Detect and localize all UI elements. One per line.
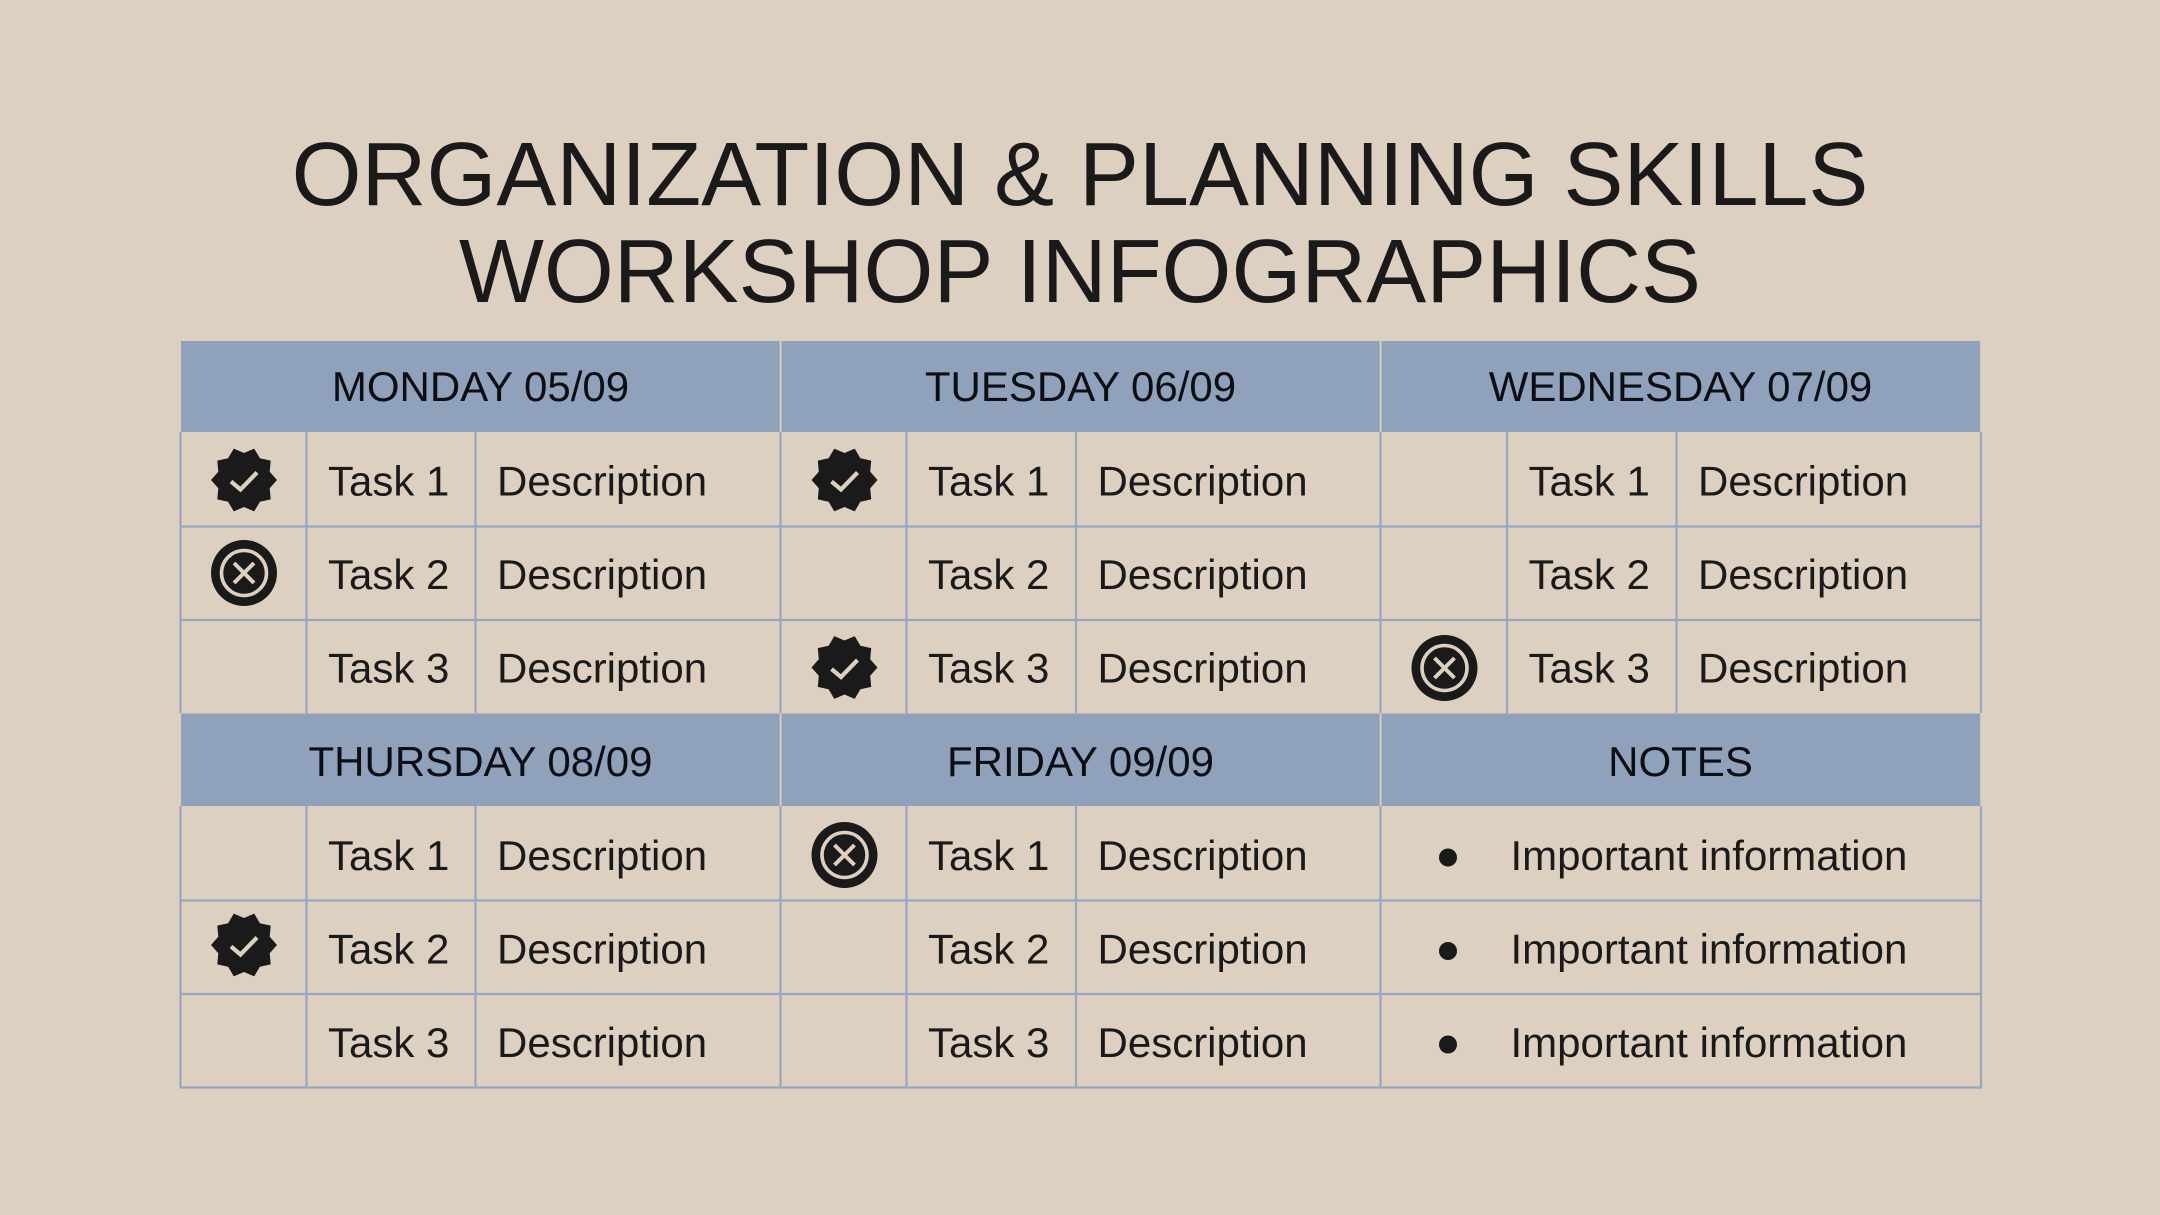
Friday row 3: Task 3 bbox=[928, 1019, 1049, 1066]
Tuesday row 3: Task 3 bbox=[928, 644, 1049, 692]
Thursday row 2 bbox=[328, 926, 707, 972]
Monday row 3: Task 3 bbox=[328, 644, 449, 692]
Notes header bbox=[1382, 714, 1980, 806]
Tuesday row 3 bbox=[928, 644, 1308, 692]
Wednesday row 1 bbox=[1528, 458, 1908, 504]
title: ORGANIZATION & PLANNING SKILLS bbox=[292, 125, 1868, 225]
Monday table grid bbox=[180, 432, 780, 713]
Thursday row 3: Task 3 bbox=[328, 1019, 449, 1066]
Monday row 2: Description bbox=[497, 551, 707, 598]
Thursday header: THURSDAY 08/09 bbox=[309, 738, 652, 785]
Wednesday table grid bbox=[1380, 432, 1981, 713]
icon: check badge bbox=[812, 636, 878, 699]
Monday row 3 bbox=[328, 644, 707, 692]
icon: cross circle bbox=[812, 822, 878, 888]
title: WORKSHOP INFOGRAPHICS bbox=[459, 222, 1701, 322]
Thursday row 3 bbox=[328, 1019, 707, 1066]
Wednesday row 1: Description bbox=[1698, 458, 1908, 504]
note 3: Important information bbox=[1510, 1019, 1907, 1066]
Monday row 2: Task 2 bbox=[328, 551, 449, 598]
Tuesday row 1: Description bbox=[1098, 458, 1308, 504]
Wednesday row 3 bbox=[1528, 644, 1908, 692]
Friday row 3: Description bbox=[1098, 1019, 1308, 1066]
icon: cross circle bbox=[211, 540, 277, 606]
Thursday row 3: Description bbox=[497, 1019, 707, 1066]
panel: Friday bbox=[780, 714, 1380, 1088]
Monday header bbox=[181, 341, 780, 432]
Thursday row 1: Description bbox=[497, 832, 707, 879]
Wednesday header: WEDNESDAY 07/09 bbox=[1489, 363, 1872, 410]
Tuesday row 2: Task 2 bbox=[928, 551, 1049, 598]
Friday row 1: Task 1 bbox=[928, 832, 1049, 879]
panel: Thursday bbox=[180, 714, 780, 1088]
icon: check badge bbox=[211, 449, 277, 511]
panel: Wednesday bbox=[1380, 341, 1981, 713]
Thursday row 2: Task 2 bbox=[328, 926, 449, 972]
title bbox=[292, 125, 1868, 322]
Notes header: NOTES bbox=[1608, 738, 1753, 785]
Friday row 1: Description bbox=[1098, 832, 1308, 879]
Monday row 3: Description bbox=[497, 644, 707, 692]
Monday row 1 bbox=[328, 458, 707, 504]
Friday row 1 bbox=[928, 832, 1308, 879]
Monday row 1: Description bbox=[497, 458, 707, 504]
Thursday row 2: Description bbox=[497, 926, 707, 972]
Friday row 2 bbox=[928, 926, 1308, 972]
Wednesday row 2 bbox=[1528, 551, 1908, 598]
Wednesday row 2: Description bbox=[1698, 551, 1908, 598]
Friday row 2: Task 2 bbox=[928, 926, 1049, 972]
Notes table grid bbox=[1380, 806, 1982, 1088]
Friday row 2: Description bbox=[1098, 926, 1308, 972]
Thursday table grid bbox=[180, 806, 780, 1088]
Monday row 2 bbox=[328, 551, 707, 598]
panel: Notes bbox=[1380, 714, 1982, 1088]
Friday row 3 bbox=[928, 1019, 1308, 1066]
Friday header: FRIDAY 09/09 bbox=[947, 738, 1214, 785]
icon: check badge bbox=[812, 449, 878, 511]
Tuesday row 1 bbox=[928, 458, 1308, 504]
Tuesday header: TUESDAY 06/09 bbox=[925, 363, 1236, 410]
Wednesday row 3: Task 3 bbox=[1528, 644, 1650, 692]
icon: check badge bbox=[211, 914, 277, 976]
Wednesday row 3: Description bbox=[1698, 644, 1908, 692]
Tuesday row 2 bbox=[928, 551, 1308, 598]
Thursday row 1 bbox=[328, 832, 707, 879]
Tuesday row 2: Description bbox=[1098, 551, 1308, 598]
Thursday header bbox=[181, 714, 780, 806]
note 2: Important information bbox=[1510, 926, 1907, 972]
Friday header bbox=[782, 714, 1380, 806]
Tuesday row 3: Description bbox=[1098, 644, 1308, 692]
Tuesday row 1: Task 1 bbox=[928, 458, 1049, 504]
panel: Monday bbox=[180, 341, 780, 713]
note 1: Important information bbox=[1510, 832, 1907, 879]
panel: Tuesday bbox=[780, 341, 1380, 713]
icon: cross circle bbox=[1412, 635, 1478, 701]
Tuesday header bbox=[782, 341, 1380, 432]
Wednesday header bbox=[1382, 341, 1980, 432]
Friday table grid bbox=[780, 806, 1380, 1088]
Monday row 1: Task 1 bbox=[328, 458, 449, 504]
Tuesday table grid bbox=[780, 432, 1380, 713]
Thursday row 1: Task 1 bbox=[328, 832, 449, 879]
Wednesday row 1: Task 1 bbox=[1528, 458, 1650, 504]
Wednesday row 2: Task 2 bbox=[1528, 551, 1650, 598]
Monday header: MONDAY 05/09 bbox=[332, 363, 629, 410]
